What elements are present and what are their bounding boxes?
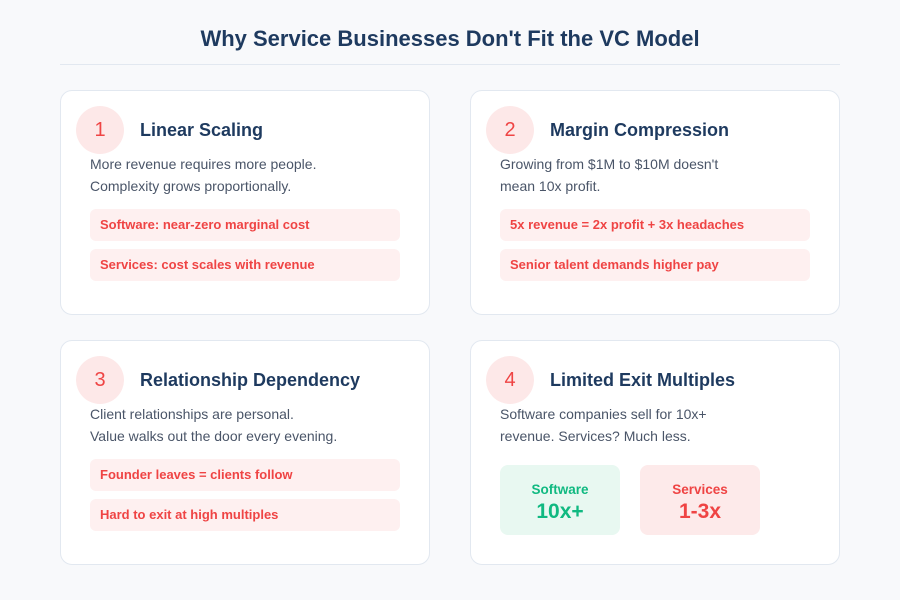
- panel: margin compression: [470, 90, 840, 315]
- stat: software: 10x+: [536, 500, 584, 523]
- pill: software: [90, 209, 400, 241]
- pill: founder leaves: Founder leaves = clients follow: [100, 467, 293, 482]
- text block: More revenue requires more people.: [90, 156, 316, 172]
- text block: [90, 156, 316, 194]
- pill: software: Software: near-zero marginal cost: [100, 217, 310, 232]
- text block: [500, 156, 718, 194]
- icon: number 3: 3: [94, 369, 106, 391]
- pill: founder leaves: [90, 459, 400, 491]
- icon: number 4: [486, 356, 534, 404]
- stat: services: [640, 465, 760, 535]
- text block: mean 10x profit.: [500, 178, 600, 194]
- icon: number 2: 2: [504, 119, 516, 141]
- pill: services: [90, 249, 400, 281]
- heading: Relationship Dependency: [140, 370, 360, 390]
- pill: senior talent: [500, 249, 810, 281]
- icon: number 2: [486, 106, 534, 154]
- stat: software: [500, 465, 620, 535]
- panel: limited exit multiples: [470, 340, 840, 565]
- pill: services: Services: cost scales with revenue: [100, 257, 315, 272]
- icon: number 1: 1: [94, 119, 106, 141]
- text block: revenue. Services? Much less.: [500, 428, 691, 444]
- text block: Complexity grows proportionally.: [90, 178, 291, 194]
- pill: senior talent: Senior talent demands higher pay: [510, 257, 719, 272]
- panel: linear scaling: [60, 90, 430, 315]
- panel: relationship dependency: [60, 340, 430, 565]
- text block: [90, 406, 337, 444]
- heading: Limited Exit Multiples: [550, 370, 735, 390]
- pill: 5x revenue: 5x revenue = 2x profit + 3x headaches: [510, 217, 744, 232]
- icon: number 3: [76, 356, 124, 404]
- pill: 5x revenue: [500, 209, 810, 241]
- text block: Growing from $1M to $10M doesn't: [500, 156, 718, 172]
- heading: Linear Scaling: [140, 120, 263, 140]
- text block: Value walks out the door every evening.: [90, 428, 337, 444]
- stat: services: Services: [672, 482, 728, 497]
- heading: Margin Compression: [550, 120, 729, 140]
- stat: software: Software: [531, 482, 588, 497]
- stat: services: 1-3x: [679, 500, 721, 523]
- icon: number 4: 4: [504, 369, 516, 391]
- icon: number 1: [76, 106, 124, 154]
- text block: Client relationships are personal.: [90, 406, 294, 422]
- text block: Software companies sell for 10x+: [500, 406, 707, 422]
- pill: hard to exit: [90, 499, 400, 531]
- text block: [500, 406, 707, 444]
- title: Why Service Businesses Don't Fit the VC Model: [200, 26, 700, 51]
- pill: hard to exit: Hard to exit at high multiples: [100, 507, 278, 522]
